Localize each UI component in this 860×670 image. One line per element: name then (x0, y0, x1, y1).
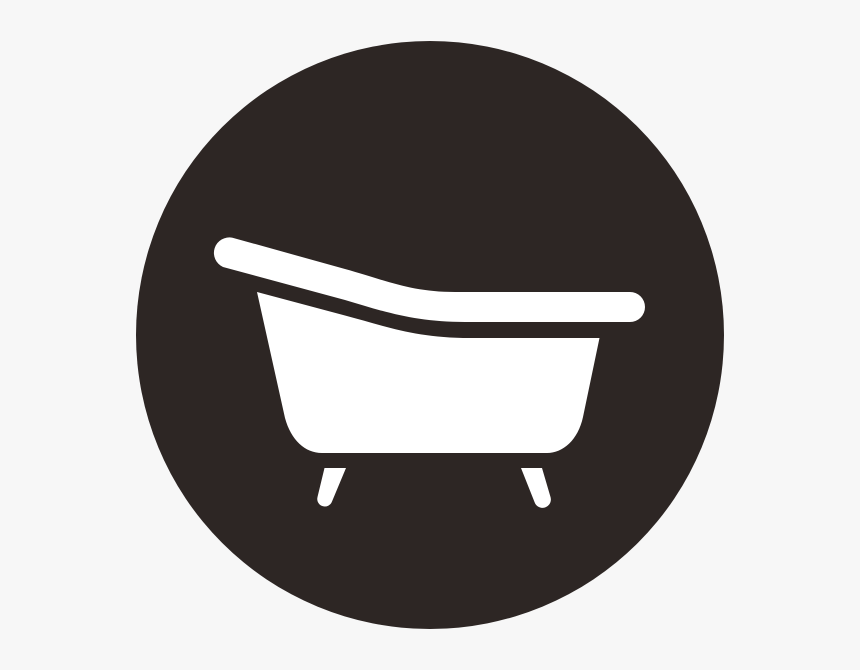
tub body (257, 292, 600, 453)
left tub foot (317, 468, 346, 506)
right tub foot (521, 468, 551, 508)
tub rim (214, 237, 645, 322)
dark circle background (136, 41, 724, 629)
